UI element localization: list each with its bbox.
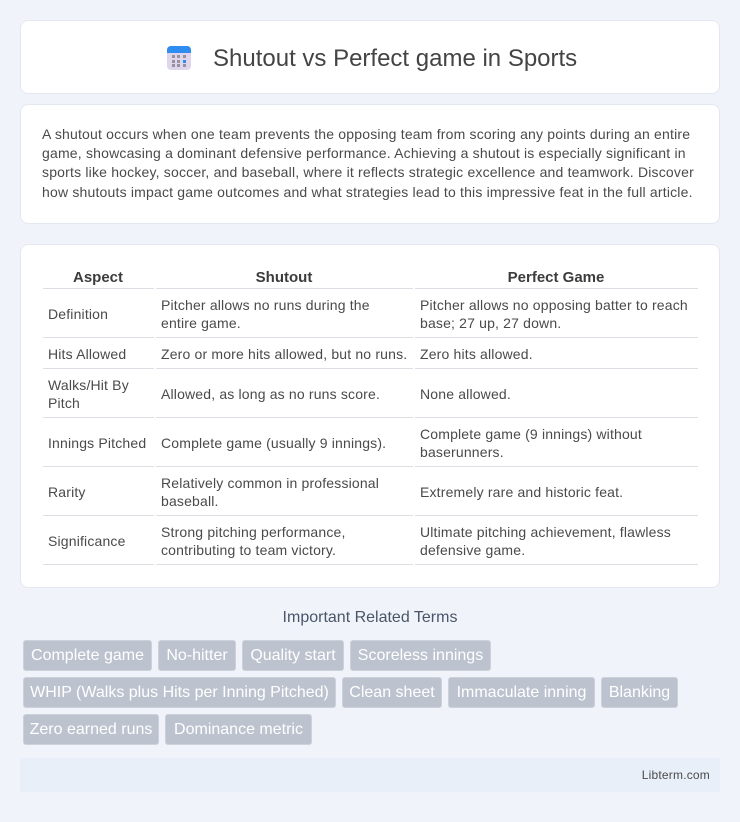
text: None allowed.	[420, 386, 511, 402]
text: intro paragraph: sports like hockey, soccer, and baseball, where it reflects strategic excellence and teamwork. Discover	[42, 164, 694, 180]
text: Pitch	[48, 395, 80, 411]
footer	[20, 758, 720, 792]
tag	[601, 677, 678, 708]
tag	[242, 640, 344, 671]
text: contributing to team victory.	[161, 542, 336, 558]
table heading: Aspect: Aspect	[73, 269, 123, 286]
row: Walks/Hit By Pitch	[48, 377, 511, 411]
tag	[448, 677, 595, 708]
text: Hits Allowed	[48, 346, 126, 362]
row: Significance	[48, 524, 671, 558]
title: Shutout vs Perfect game in Sports	[213, 45, 577, 72]
row: Rarity	[48, 475, 623, 509]
text: Walks/Hit By	[48, 377, 129, 393]
text: Pitcher allows no runs during the	[161, 297, 370, 313]
text: Pitcher allows no opposing batter to reach	[420, 297, 688, 313]
text: Zero hits allowed.	[420, 346, 533, 362]
tag	[23, 714, 159, 745]
panel: header	[20, 20, 720, 94]
text: base; 27 up, 27 down.	[420, 315, 561, 331]
text: baserunners.	[420, 444, 504, 460]
tag: Immaculate inning	[457, 684, 586, 701]
tag: Quality start	[250, 647, 336, 664]
text: Zero or more hits allowed, but no runs.	[161, 346, 407, 362]
panel: intro	[20, 104, 720, 224]
text: Relatively common in professional	[161, 475, 379, 491]
tag	[158, 640, 236, 671]
panel: comparison table	[20, 244, 720, 588]
footer: Libterm.com	[642, 768, 710, 782]
tag	[23, 640, 152, 671]
tag	[342, 677, 442, 708]
row: Hits Allowed	[48, 346, 533, 362]
tag: Complete game	[31, 647, 144, 664]
tag: Zero earned runs	[30, 721, 152, 738]
text: Ultimate pitching achievement, flawless	[420, 524, 671, 540]
text: Extremely rare and historic feat.	[420, 484, 623, 500]
tag	[165, 714, 312, 745]
text: Innings Pitched	[48, 435, 146, 451]
text: baseball.	[161, 493, 219, 509]
text: defensive game.	[420, 542, 525, 558]
tag: Scoreless innings	[358, 647, 483, 664]
table heading: Shutout: Shutout	[256, 269, 312, 286]
text: intro paragraph: how shutouts impact game outcomes and what strategies lead to this impressive feat in the full article.	[42, 184, 693, 200]
text: Allowed, as long as no runs score.	[161, 386, 380, 402]
tag: Clean sheet	[349, 684, 435, 701]
text: Strong pitching performance,	[161, 524, 346, 540]
row: Definition	[48, 297, 688, 331]
text: Complete game (9 innings) without	[420, 426, 642, 442]
text: intro paragraph: game, showcasing a dominant defensive performance. Achieving a shutout is especially significant in	[42, 145, 686, 161]
tag: Dominance metric	[174, 721, 303, 738]
text: Complete game (usually 9 innings).	[161, 435, 386, 451]
text: entire game.	[161, 315, 241, 331]
heading: related terms: Important Related Terms	[283, 609, 457, 626]
tag: No-hitter	[166, 647, 228, 664]
tag: WHIP (Walks plus Hits per Inning Pitched)	[30, 684, 329, 701]
tag	[23, 677, 336, 708]
tag list: related terms	[23, 640, 678, 745]
text: Definition	[48, 306, 108, 322]
tag	[350, 640, 491, 671]
table heading: Perfect Game: Perfect Game	[508, 269, 604, 286]
text: intro paragraph	[42, 126, 694, 200]
row: Innings Pitched	[48, 426, 642, 460]
text: intro paragraph: A shutout occurs when one team prevents the opposing team from scoring any points during an entire	[42, 126, 690, 142]
icon: calendar	[167, 46, 191, 70]
text: Significance	[48, 533, 126, 549]
text: Rarity	[48, 484, 86, 500]
tag: Blanking	[609, 684, 670, 701]
